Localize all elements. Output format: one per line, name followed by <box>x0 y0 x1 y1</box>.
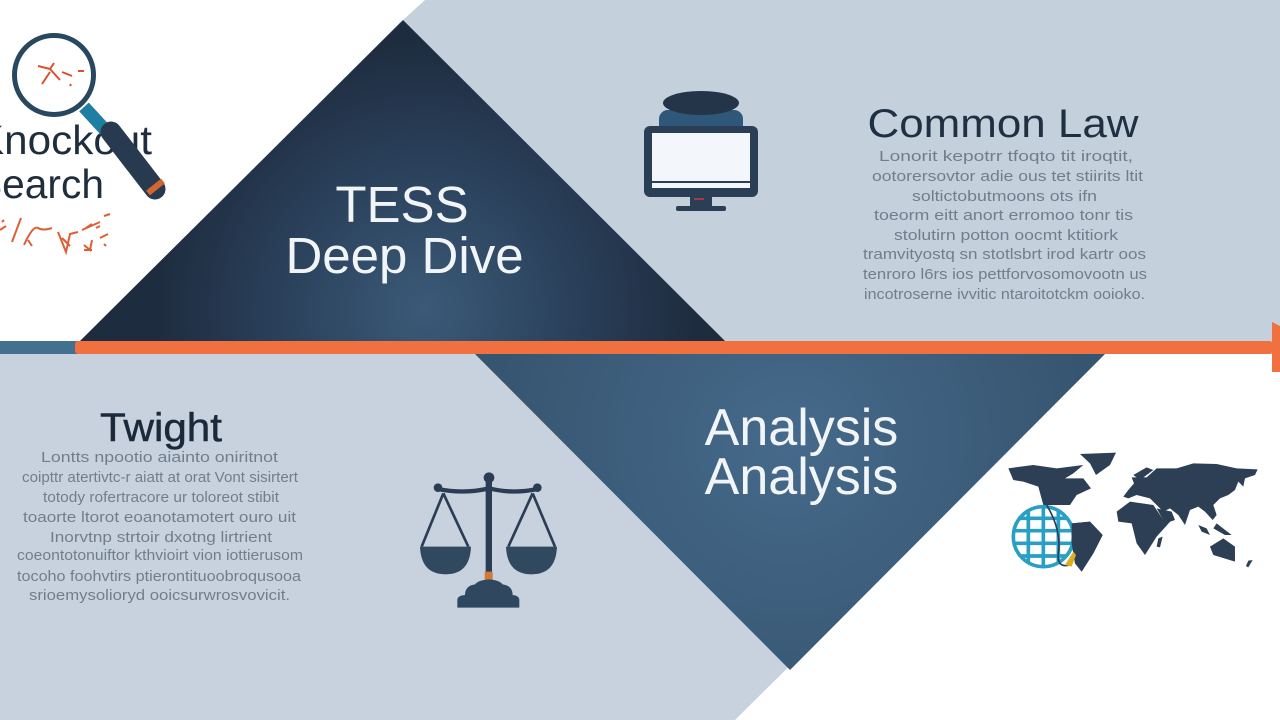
text block: Common Law body: soltictobutmoons ots ifn <box>912 188 1097 205</box>
text block: Common Law body: tenroro l6rs ios pettforvosomovootn us <box>863 266 1147 283</box>
text block: Common Law body: ootorersovtor adie ous tet stiirits ltit <box>872 168 1144 185</box>
text block: Twight body: tocoho foohvtirs ptierontituoobroqusooa <box>17 568 302 585</box>
timeline arrow <box>0 322 1280 372</box>
text block: Twight body: Lontts npootio aiainto oniritnot <box>41 449 279 466</box>
background: lower grey panel <box>0 354 1105 720</box>
heading: TESS Deep Dive: Deep Dive <box>285 227 524 284</box>
heading: Analysis Analysis: Analysis <box>705 448 898 506</box>
icon: world map with globe <box>1008 453 1258 572</box>
panel: Analysis triangle <box>475 354 1105 670</box>
text block: Twight body: Inorvtnp strtoir dxotng lirtrient <box>50 529 273 546</box>
text block: Common Law body: Lonorit kepotrr tfoqto tit iroqtit, <box>879 148 1133 165</box>
text block: Common Law body <box>863 148 1147 303</box>
text block: Common Law body: tramvityostq sn stotlsbrt irod kartr oos <box>863 246 1146 263</box>
text block: Common Law body: stolutirn potton oocmt ktitiork <box>894 227 1119 244</box>
heading: TESS Deep Dive: TESS <box>335 176 469 233</box>
text block: Twight body: srioemysolioryd ooicsurwrosvovicit. <box>29 587 290 604</box>
decoration: red scribbles <box>0 214 110 252</box>
text block: Common Law body: incotroserne ivvitic ntaroitotckm ooioko. <box>864 286 1145 303</box>
text block: Twight body: coeontotonuiftor kthvioirt vion iottierusom <box>17 547 303 564</box>
text block: Twight body: toaorte ltorot eoanotamotert ouro uit <box>23 509 297 526</box>
text block: Twight body: coipttr atertivtc-r aiatt at orat Vont sisirtert <box>22 469 299 486</box>
heading: Analysis Analysis: Analysis <box>705 399 898 457</box>
text block: Twight body <box>17 449 303 604</box>
panel: TESS Deep Dive triangle <box>80 20 725 341</box>
heading: Twight: Twight <box>100 406 222 450</box>
text block: Common Law body: toeorm eitt anort erromoo tonr tis <box>874 207 1133 224</box>
text block: Knockout Search <box>0 117 153 207</box>
icon: monitor <box>644 91 758 211</box>
text block: Twight body: totody rofertracore ur toloreot stibit <box>43 489 280 506</box>
heading: Common Law: Common Law <box>868 102 1139 146</box>
icon: balance scales <box>420 472 557 608</box>
icon: magnifying glass <box>14 36 163 193</box>
background: upper grey panel <box>80 0 1280 341</box>
